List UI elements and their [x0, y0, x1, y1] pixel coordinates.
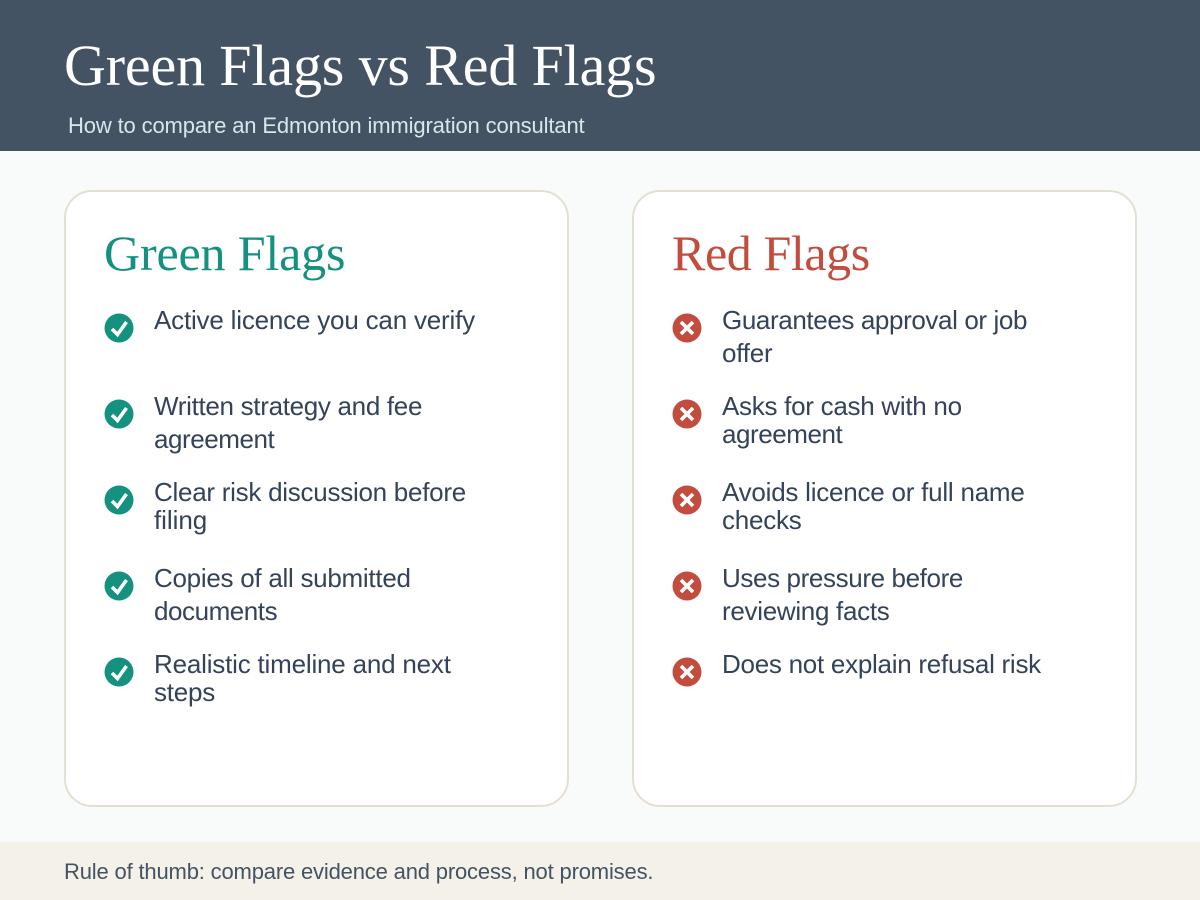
icon: check: [104, 486, 134, 514]
item text: [722, 563, 963, 626]
item text: [722, 391, 962, 449]
item text: Clear risk discussion before: [154, 477, 466, 507]
panel: red flags: [632, 190, 1137, 807]
item text: Uses pressure before: [722, 563, 963, 593]
panel: green flags: [64, 190, 569, 807]
item text: reviewing facts: [722, 596, 889, 626]
icon: cross: [672, 658, 702, 686]
item text: Active licence you can verify: [154, 305, 475, 335]
icon: cross: [672, 400, 702, 428]
icon: check: [104, 400, 134, 428]
item text: [154, 563, 411, 626]
item text: Written strategy and fee: [154, 391, 422, 421]
heading: green flags: Green Flags: [104, 225, 345, 281]
icon: check: [104, 572, 134, 600]
title: Green Flags vs Red Flags: [64, 33, 656, 98]
icon: cross: [672, 486, 702, 514]
item text: [154, 649, 451, 707]
item text: Avoids licence or full name: [722, 477, 1025, 507]
icon: cross: [672, 572, 702, 600]
item text: filing: [154, 505, 207, 535]
icon: cross: [672, 314, 702, 342]
item text: agreement: [722, 419, 842, 449]
item text: Guarantees approval or job: [722, 305, 1027, 335]
item text: Asks for cash with no: [722, 391, 962, 421]
item text: [154, 477, 466, 535]
header band: [0, 0, 1200, 151]
item text: Realistic timeline and next: [154, 649, 451, 679]
item text: steps: [154, 677, 215, 707]
item text: [722, 477, 1025, 535]
item text: agreement: [154, 424, 274, 454]
icon: check: [104, 314, 134, 342]
icon: check: [104, 658, 134, 686]
footer note: Rule of thumb: compare evidence and process, not promises.: [64, 859, 653, 884]
heading: red flags: Red Flags: [672, 225, 870, 281]
item text: [722, 305, 1027, 368]
footer band: [0, 842, 1200, 900]
subtitle: How to compare an Edmonton immigration consultant: [68, 113, 585, 138]
item text: Does not explain refusal risk: [722, 649, 1041, 679]
item text: [154, 391, 422, 454]
item text: documents: [154, 596, 277, 626]
item text: Copies of all submitted: [154, 563, 411, 593]
item text: offer: [722, 338, 772, 368]
item text: checks: [722, 505, 802, 535]
